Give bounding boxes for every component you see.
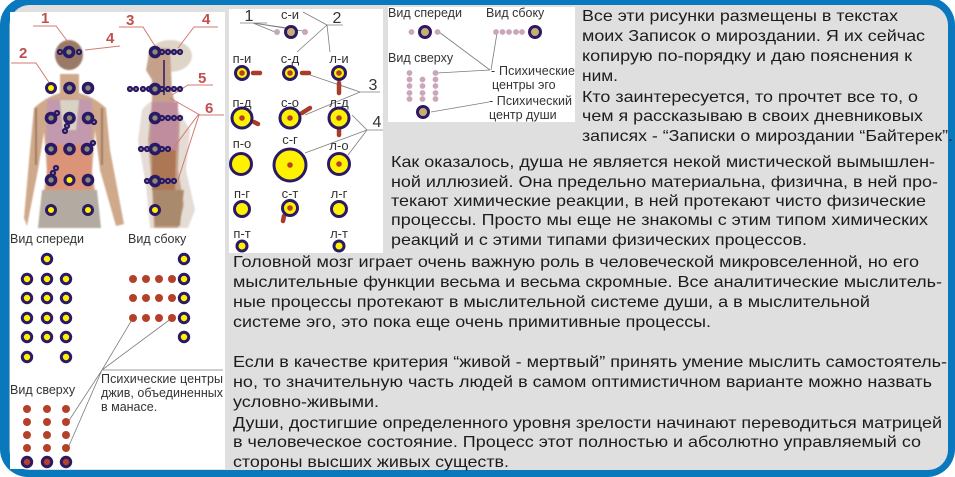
view labels <box>10 232 187 397</box>
label rows: п-и <box>233 51 251 66</box>
label rows: л-т <box>330 226 348 241</box>
leader lines <box>431 32 497 112</box>
text block: intro <box>582 8 953 145</box>
view labels: Вид спереди <box>388 6 462 20</box>
figure: side body <box>138 40 195 228</box>
text block: intro: моих Записок о мироздании. Я их сейчас <box>582 28 925 45</box>
text block: brain: Головной мозг играет очень важную роль в человеческой микровселенной, но его <box>233 254 919 271</box>
view labels: Вид сверху <box>388 51 454 65</box>
legend text: центры эго <box>492 78 556 92</box>
text block: criterion: но, то значительную часть людей в самом оптимистичном варианте можно назвать <box>233 374 932 391</box>
view labels: Вид сверху <box>10 383 76 397</box>
red leader lines <box>11 26 224 180</box>
leader lines <box>240 12 383 155</box>
view labels: Вид спереди <box>10 232 84 246</box>
text block: criterion: в человеческое состояние. Процесс этот полностью и абсолютно управляемый со <box>233 434 921 451</box>
legend text: - Психический <box>489 94 572 108</box>
label rows: с-д <box>281 51 300 66</box>
dots <box>407 26 540 118</box>
arrows: red stubs <box>253 73 339 221</box>
text block: brain: ные процессы протекают в мыслительной системе души, а в мыслительной <box>233 294 870 311</box>
text block: soul <box>391 154 938 249</box>
text block: intro: ним. <box>582 68 618 85</box>
label rows: л-и <box>329 51 349 66</box>
text block: intro: записях - “Записки о мироздании “Байтерек”. <box>582 128 953 145</box>
text block: criterion: Если в качестве критерия “живой - мертвый” принять умение мыслить самостоятель- <box>233 354 947 371</box>
label rows: 3 <box>369 77 378 94</box>
label rows: п-д <box>233 95 252 110</box>
dots: side view <box>129 254 189 342</box>
panel: anatomy figures <box>10 10 225 229</box>
number labels: 2 <box>19 45 27 62</box>
number labels: 6 <box>205 100 213 117</box>
label rows: с-г <box>282 132 298 147</box>
number labels: 1 <box>41 10 49 27</box>
text block: soul: ной иллюзией. Она предельно материальна, физична, в ней про- <box>391 174 938 191</box>
caption: jiva centers: Психические центры <box>101 372 223 386</box>
label rows: п-т <box>233 226 251 241</box>
label rows: п-о <box>233 136 251 151</box>
text block: criterion: Души, достигшие определенного уровня зрелости начинают переводиться матрицей <box>233 415 942 432</box>
centers: front view <box>46 48 96 214</box>
label rows: с-т <box>282 186 298 201</box>
text block: intro: Кто заинтересуется, то прочтет все то, о <box>582 89 918 106</box>
text block: intro: чем я рассказываю в своих дневниковых <box>582 108 923 125</box>
caption: jiva centers: джив, объединенных <box>101 386 224 400</box>
legend text: - Психические <box>491 64 575 78</box>
label rows: л-д <box>329 95 349 110</box>
figure: front body <box>24 40 124 228</box>
panel: jiva centers views <box>10 229 225 469</box>
connector lines <box>68 318 223 448</box>
caption: jiva centers: в манасе. <box>101 400 157 414</box>
label rows: л-о <box>329 138 349 153</box>
dots: top view <box>22 405 71 467</box>
label rows: с-о <box>281 95 299 110</box>
number labels: 3 <box>126 12 134 29</box>
text block: soul: реакций и с этими типами физических процессов. <box>391 232 807 249</box>
panel: ego and soul centers <box>388 6 575 122</box>
centers: side view <box>128 48 182 214</box>
view labels: Вид сбоку <box>128 232 187 246</box>
label rows: л-г <box>331 186 348 201</box>
text block: criterion: стороны высших живых существ. <box>233 454 509 471</box>
view labels <box>388 6 545 65</box>
number labels: 4 <box>106 30 115 47</box>
number labels: 5 <box>198 70 206 87</box>
legend text: центр души <box>489 108 557 122</box>
legend text <box>489 64 575 122</box>
number labels <box>19 10 213 117</box>
dots: front view <box>22 254 71 362</box>
label rows: п-г <box>234 186 250 201</box>
text block: criterion: условно-живыми. <box>233 394 379 411</box>
text block: soul: процессы. Просто мы еще не знакомы с этим типом химических <box>391 212 928 229</box>
number labels: 4 <box>202 11 211 28</box>
text block: soul: Как оказалось, душа не является некой мистической вымышлен- <box>391 154 935 171</box>
text block: brain: мыслительные функции весьма и весьма скромные. Все аналитические мыслитель- <box>233 274 942 291</box>
text block: brain <box>233 254 942 331</box>
view labels: Вид сбоку <box>486 6 545 20</box>
text block: intro: Все эти рисунки размещены в текстах <box>582 8 898 25</box>
panel: centers schema <box>229 7 383 253</box>
label rows: 2 <box>333 10 342 27</box>
label rows <box>233 7 382 241</box>
label rows: 1 <box>245 8 254 25</box>
label rows: с-и <box>281 7 299 22</box>
text block: criterion <box>233 354 947 471</box>
label rows: 4 <box>373 114 382 131</box>
text block: intro: копирую по-порядку и даю пояснения к <box>582 48 913 65</box>
text block: soul: текают химические реакции, в ней протекают чисто физические <box>391 193 926 210</box>
caption: jiva centers <box>101 372 224 414</box>
circles: centers <box>230 26 350 251</box>
text block: brain: системе эго, это пока еще очень примитивные процессы. <box>233 314 711 331</box>
